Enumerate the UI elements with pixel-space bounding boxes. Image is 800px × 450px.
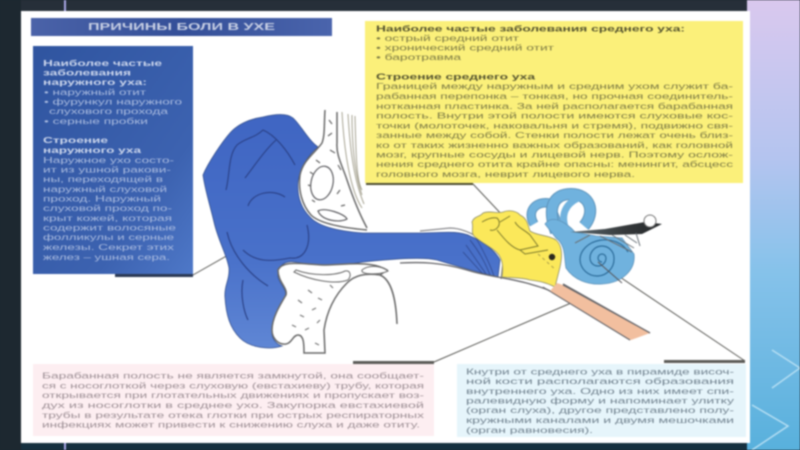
- panel: inner ear note: ной кости располагаются образования: [466, 376, 735, 386]
- middle ear (yellow): [472, 211, 561, 287]
- panel: Eustachian tube note: дух из носоглотки в среднее ухо. Закупорка евстахиевой: [42, 400, 424, 410]
- panel: middle ear diseases: занные между собой. Стенки полости лежат очень близ-: [376, 130, 733, 140]
- panel: outer ear diseases: ит из ушной ракови-: [43, 164, 171, 174]
- panel: inner ear note: (орган слуха), другое представлено полу-: [466, 405, 734, 415]
- panel: middle ear diseases: • острый средний отит: [376, 33, 519, 43]
- panel: inner ear note: внутреннего уха. Одно из них имеет спи-: [466, 386, 734, 396]
- panel: middle ear diseases: Строение среднего уха: [376, 72, 535, 82]
- panel: middle ear diseases: • баротравма: [376, 52, 461, 62]
- panel: outer ear diseases: проход. Наружный: [43, 194, 161, 204]
- panel: outer ear diseases: наружного уха: [43, 145, 141, 155]
- panel: outer ear diseases: содержит волосяные: [43, 222, 176, 232]
- panel: inner ear note: (орган равновесия).: [466, 425, 593, 435]
- panel: outer ear diseases: Наиболее частые: [43, 58, 162, 68]
- panel: outer ear diseases: заболевания: [43, 68, 131, 78]
- panel: middle ear diseases: • хронический средний отит: [376, 42, 554, 52]
- leader lines: [193, 184, 745, 362]
- lower temporal bone: [272, 263, 397, 353]
- panel: outer ear diseases: слуховой проход по-: [43, 203, 172, 213]
- panel: outer ear diseases: Наружное ухо состо-: [43, 155, 174, 165]
- panel: middle ear diseases: нения среднего отита крайне опасны: менингит, абсцесс: [376, 159, 734, 169]
- panel: outer ear diseases: • серные пробки: [44, 116, 148, 126]
- panel: Eustachian tube note: Барабанная полость не является замкнутой, она сообщает-: [42, 370, 424, 380]
- panel: outer ear diseases: желез – ушная сера.: [43, 252, 170, 262]
- panel: middle ear diseases: Границей между наружным и средним ухом служит ба-: [376, 81, 733, 91]
- canal outer wall lines: [420, 228, 503, 279]
- panel: outer ear diseases: железы. Секрет этих: [43, 242, 175, 252]
- panel: Eustachian tube note: ся с носоглоткой через слуховую (евстахиеву) трубу, которая: [42, 380, 425, 390]
- panel: Eustachian tube note: открывается при глотательных движениях и пропускает воз-: [42, 390, 424, 400]
- cochlear nerve: [570, 215, 662, 252]
- panel: outer ear diseases: ны, переходящей в: [43, 174, 164, 184]
- panel: outer ear diseases: • фурункул наружного: [44, 96, 182, 106]
- panel: middle ear diseases: ко от таких жизненно важных образований, как головной: [376, 140, 733, 150]
- inner ear: semicircular canals and cochlea: [531, 194, 634, 284]
- panel: middle ear diseases: Наиболее частые заболевания среднего уха:: [376, 24, 685, 34]
- upper temporal bone: [299, 110, 367, 230]
- illustration: ear cross-section: [203, 110, 662, 353]
- panel: middle ear diseases: мозг, крупные сосуды и лицевой нерв. Поэтому ослож-: [376, 150, 733, 160]
- panel: inner ear note: ралевидную форму и напоминает улитку: [466, 396, 735, 406]
- panel: inner ear note: Кнутри от среднего уха в пирамиде височ-: [466, 366, 734, 376]
- Eustachian tube: [550, 283, 650, 340]
- panel: outer ear diseases: наружного уха:: [43, 77, 147, 87]
- panel: inner ear note: кружными каналами и двумя мешочками: [466, 415, 734, 425]
- panel: middle ear diseases: рабанная перепонка – тонкая, но прочная соединитель-: [376, 91, 733, 101]
- panel: Eustachian tube note: трубы в результате отека глотки при острых респираторных: [42, 410, 425, 420]
- title band: [31, 18, 332, 36]
- panel: middle ear diseases: нотканная пластинка. За ней располагается барабанная: [376, 101, 734, 111]
- panel: middle ear diseases: [365, 21, 743, 185]
- panel: outer ear diseases: слухового прохода: [49, 106, 168, 116]
- panel: outer ear diseases: фолликулы и серные: [43, 232, 174, 242]
- panel: outer ear diseases: наружный слуховой: [43, 184, 167, 194]
- panel: outer ear diseases: [33, 46, 193, 277]
- panel: outer ear diseases: Строение: [43, 135, 108, 145]
- panel: inner ear note: [457, 360, 746, 437]
- auricle and ear canal: [203, 114, 500, 348]
- title band: ПРИЧИНЫ БОЛИ В УХЕ: [88, 21, 275, 33]
- panel: outer ear diseases: • наружный отит: [44, 87, 146, 97]
- panel: middle ear diseases: полость. Внутри этой полости имеются слуховые кос-: [376, 110, 733, 120]
- decorative right strip with chevrons: [747, 0, 800, 450]
- panel: Eustachian tube note: [33, 361, 434, 436]
- panel: Eustachian tube note: инфекциях может привести к снижению слуха и даже отиту.: [42, 420, 420, 430]
- panel: middle ear diseases: головного мозга, неврит лицевого нерва.: [376, 169, 635, 179]
- panel: outer ear diseases: крыт кожей, которая: [43, 213, 173, 223]
- panel: middle ear diseases: точки (молоточек, наковальня и стремя), подвижно свя-: [376, 120, 733, 130]
